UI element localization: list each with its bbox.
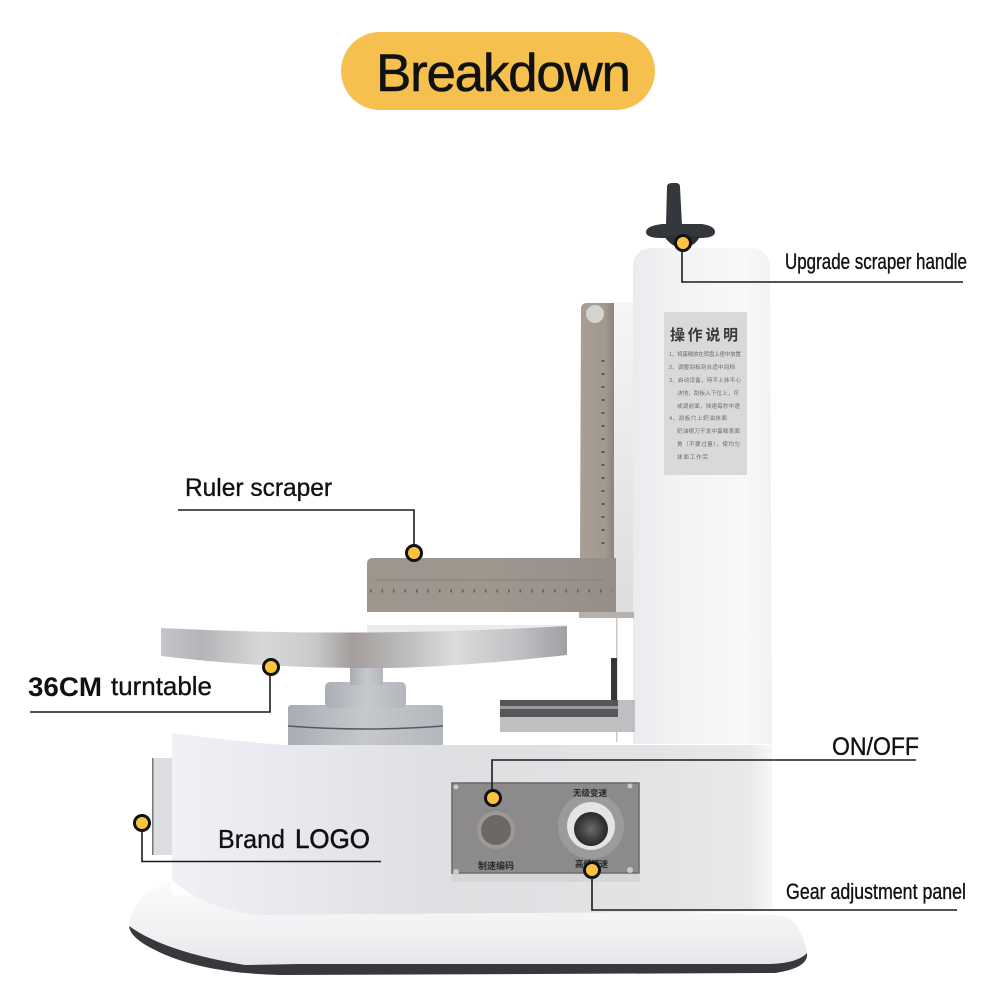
operating instructions label: 3、启动设备，待平上抹平心 <box>669 376 741 384</box>
hub stack <box>288 665 443 747</box>
operating instructions label: 操作说明 <box>670 326 738 344</box>
callout: brand logo: LOGO <box>295 824 370 854</box>
operating instructions label: 4、刮板穴上奶油抹面 <box>669 414 727 422</box>
operating instructions label: 2、调整刮板到合适中间档 <box>669 363 735 371</box>
control panel <box>451 782 640 882</box>
callout: ruler scraper <box>178 474 422 560</box>
speed knob <box>558 793 624 859</box>
machine: cake scraper <box>129 183 807 975</box>
callout: brand logo: Brand <box>218 824 285 854</box>
callout: upgrade scraper handle <box>676 236 967 282</box>
operating instructions label: 1、将蛋糕放在转盘上居中放置 <box>669 350 741 358</box>
handle knob <box>646 183 715 248</box>
operating instructions label <box>664 312 747 475</box>
callout: gear adjustment panel <box>584 862 966 910</box>
callout: ruler scraper: Ruler scraper <box>185 474 332 502</box>
operating instructions label: 决地，刮板入下位上，可 <box>677 389 739 397</box>
vertical column <box>633 248 772 744</box>
operating instructions label: 或调前面，抹速每秒中速 <box>677 402 740 410</box>
operating instructions label: 奶油根刀干发中蛋糕表面 <box>677 427 740 435</box>
panel screws <box>453 784 633 875</box>
left power button <box>477 811 515 849</box>
callout: 36CM turntable: 36CM <box>28 672 102 702</box>
operating instructions label: 抹面工作完 <box>677 453 708 461</box>
thin rod and bracket <box>500 618 635 742</box>
callout: 36CM turntable: turntable <box>111 671 212 701</box>
callout: 36CM turntable <box>28 660 278 712</box>
black rubber foot <box>129 926 807 975</box>
vertical ruler <box>580 303 614 559</box>
callout: on/off: ON/OFF <box>832 733 919 761</box>
control panel: 制速编码 <box>478 860 514 871</box>
control panel: 无级变速 <box>573 788 607 798</box>
title pill: Breakdown <box>376 44 631 103</box>
turntable plate <box>161 625 567 668</box>
logo plate on side <box>152 758 174 855</box>
callout: brand logo <box>134 816 381 862</box>
horizontal ruler <box>367 558 634 618</box>
callout: on/off <box>486 733 919 806</box>
white backing strip behind ruler <box>612 302 634 618</box>
operating instructions label: 角（不要过量），使均匀 <box>677 440 740 448</box>
base bottom flange <box>130 882 807 968</box>
main base body <box>172 733 772 915</box>
control panel: 高低调速 <box>575 859 608 869</box>
title pill <box>341 32 655 110</box>
